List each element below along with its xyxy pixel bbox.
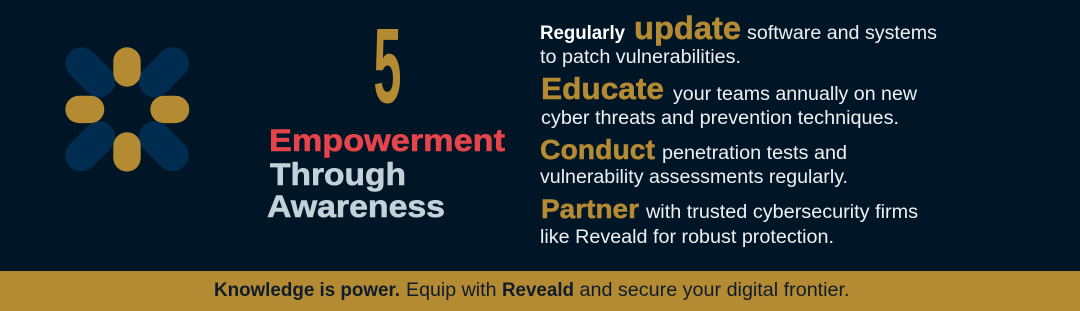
- text block: conduct tests: Conduct: [540, 134, 655, 165]
- text block: educate teams: cyber threats and prevention techniques.: [541, 108, 899, 129]
- title: Empowerment Through Awareness: Empowerment: [269, 122, 506, 158]
- text block: partner with firms: with trusted cybersecurity firms: [645, 202, 918, 223]
- text block: educate teams: [541, 72, 917, 129]
- text block: update software: [540, 10, 937, 68]
- text block: partner with firms: Partner: [541, 194, 640, 224]
- text block: partner with firms: like Reveald for robust protection.: [540, 227, 834, 248]
- text block: update software: software and systems: [747, 23, 937, 44]
- text block: update software: Regularly: [540, 23, 625, 44]
- title: Empowerment Through Awareness: Through: [270, 156, 406, 192]
- title: Empowerment Through Awareness: [267, 122, 506, 224]
- text block: educate teams: Educate: [541, 72, 664, 106]
- text block: conduct tests: penetration tests and: [662, 143, 847, 164]
- text block: conduct tests: [540, 134, 848, 188]
- text block: conduct tests: vulnerability assessments regularly.: [540, 167, 848, 188]
- footer tagline: Reveald: [502, 280, 574, 301]
- footer tagline: Equip with: [406, 280, 496, 301]
- text block: update software: update: [634, 10, 741, 46]
- text block: partner with firms: [540, 194, 918, 248]
- text block: update software: to patch vulnerabilities.: [540, 47, 741, 68]
- footer tagline: [214, 280, 850, 301]
- footer tagline: Knowledge is power.: [214, 280, 400, 301]
- footer banner: [0, 271, 1080, 311]
- text block: educate teams: your teams annually on new: [673, 84, 917, 105]
- icon: radial pill logo: [65, 47, 189, 172]
- title: Empowerment Through Awareness: Awareness: [267, 188, 445, 224]
- step number 5: 5: [374, 5, 401, 126]
- footer tagline: and secure your digital frontier.: [580, 280, 850, 301]
